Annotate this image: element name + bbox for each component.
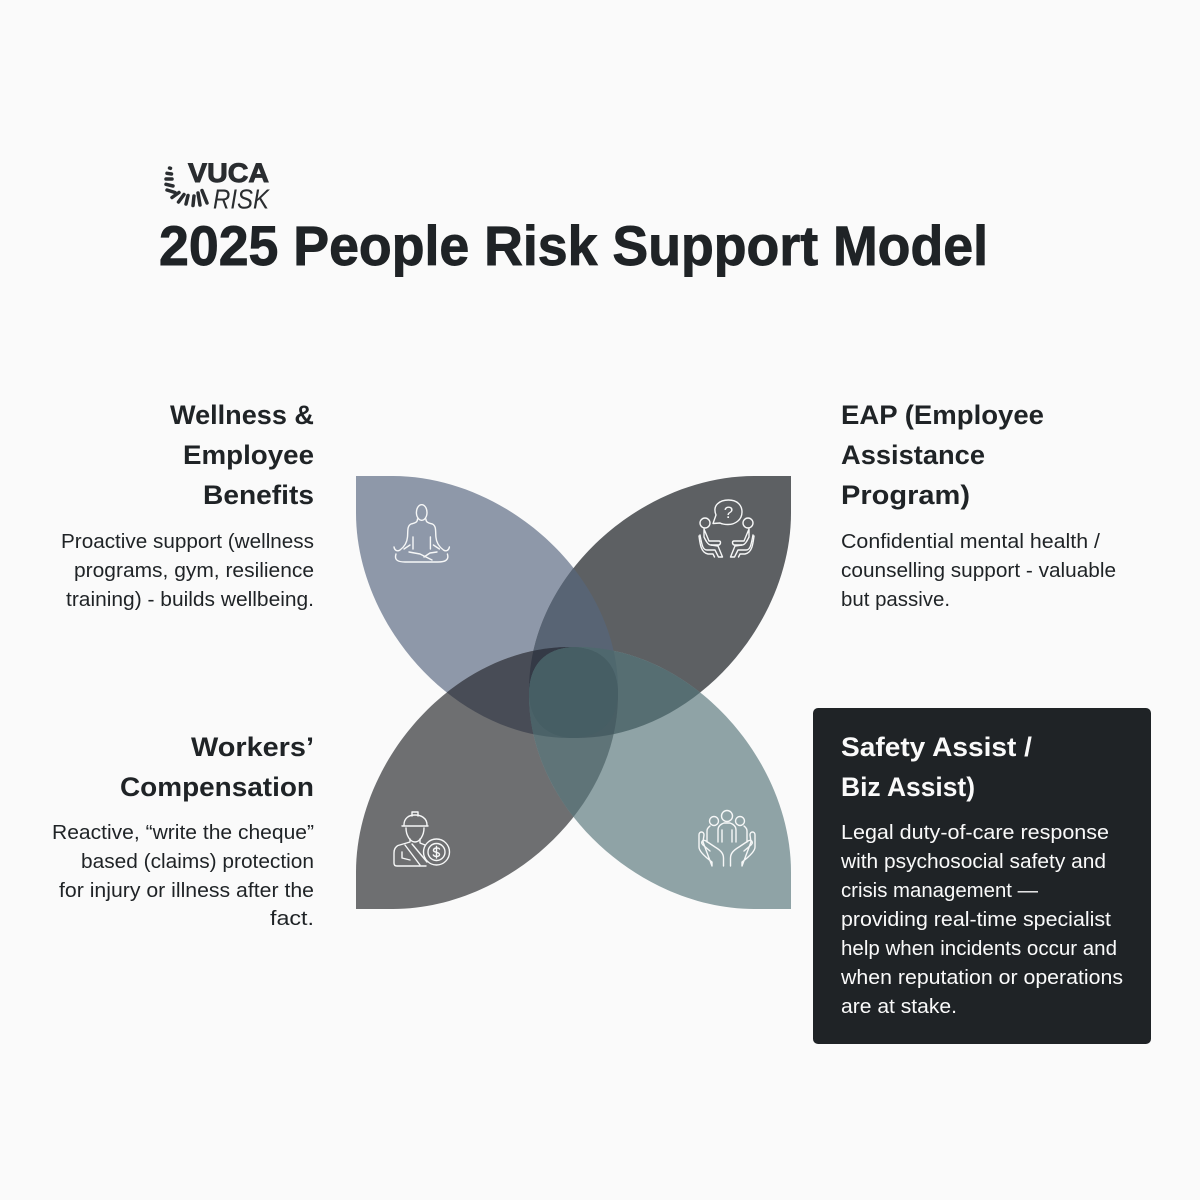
heading: safety assist: Biz Assist) [841, 772, 975, 802]
body: EAP: Confidential mental health / [841, 531, 1100, 553]
logo: VUCA Risk [166, 158, 270, 214]
speech bubble [713, 500, 742, 524]
body: safety assist: when reputation or operations [840, 967, 1123, 989]
body: workers compensation: fact. [270, 908, 314, 930]
icon: hands holding people [699, 810, 755, 866]
overlap: wellness, EAP and safety [340, 460, 810, 930]
question mark: ? [724, 503, 733, 522]
body: safety assist: help when incidents occur and [841, 938, 1117, 960]
logo mark: radial ticks [166, 168, 207, 206]
body: safety assist: are at stake. [841, 996, 957, 1018]
heading: wellness: Benefits [203, 480, 314, 510]
body: safety assist [840, 822, 1123, 1018]
body: workers compensation: for injury or illness after the [59, 880, 314, 902]
body: EAP [841, 531, 1116, 611]
title: 2025 People Risk Support Model [159, 214, 988, 277]
overlap: wellness and workers [447, 647, 562, 734]
right person [730, 518, 754, 557]
body: workers compensation: Reactive, “write the cheque” [52, 822, 314, 844]
heading: safety assist [841, 732, 1033, 802]
body: wellness: training) - builds wellbeing. [66, 589, 314, 611]
body: wellness: programs, gym, resilience [74, 560, 314, 582]
petal: EAP [529, 476, 791, 738]
petal: safety assist [529, 647, 791, 909]
overlap: centre of all four [340, 460, 810, 930]
logo word: RISK: RISK [213, 184, 270, 214]
heading: workers compensation: Workers’ [191, 732, 314, 762]
body: safety assist: providing real-time specialist [841, 909, 1111, 931]
petal: workers compensation [356, 647, 618, 909]
icon: construction worker with coin [394, 812, 450, 866]
heading: workers compensation [120, 732, 314, 802]
heading: wellness [170, 400, 314, 510]
overlap: EAP, workers and safety [578, 698, 618, 738]
heading: EAP: Program) [841, 480, 970, 510]
overlap: EAP and safety [614, 651, 700, 734]
text block: wellness and employee benefits [61, 400, 314, 611]
heading: wellness: Employee [183, 440, 314, 470]
heading: safety assist: Safety Assist / [841, 732, 1033, 762]
body: wellness: Proactive support (wellness [61, 531, 314, 553]
body: safety assist: Legal duty-of-care response [841, 822, 1109, 844]
petal diagram [356, 476, 791, 909]
logo word: VUCA: VUCA [188, 158, 269, 188]
body: safety assist: with psychosocial safety and [840, 851, 1106, 873]
icon: meditating person [394, 505, 449, 562]
body: workers compensation [52, 822, 314, 930]
overlap: wellness, EAP and workers [529, 647, 570, 688]
body: wellness [61, 531, 314, 611]
icon: counselling conversation [699, 500, 754, 557]
text block: workers compensation [52, 732, 314, 930]
panel: safety assist [813, 708, 1151, 1044]
body: EAP: counselling support - valuable [841, 560, 1116, 582]
heading: EAP [841, 400, 1044, 510]
body: EAP: but passive. [841, 589, 950, 611]
heading: wellness: Wellness & [170, 400, 314, 430]
overlap: wellness, workers and safety [529, 698, 568, 738]
overlap: workers and safety [529, 702, 614, 817]
overlap: wellness and EAP [534, 568, 614, 650]
text block: EAP [841, 400, 1116, 611]
body: workers compensation: based (claims) protection [81, 851, 314, 873]
panel background [813, 708, 1151, 1044]
left person [699, 518, 722, 557]
petal: wellness [356, 476, 618, 738]
body: safety assist: crisis management — [841, 880, 1038, 902]
heading: EAP: Assistance [841, 440, 985, 470]
heading: EAP: EAP (Employee [841, 400, 1044, 430]
heading: workers compensation: Compensation [120, 772, 314, 802]
